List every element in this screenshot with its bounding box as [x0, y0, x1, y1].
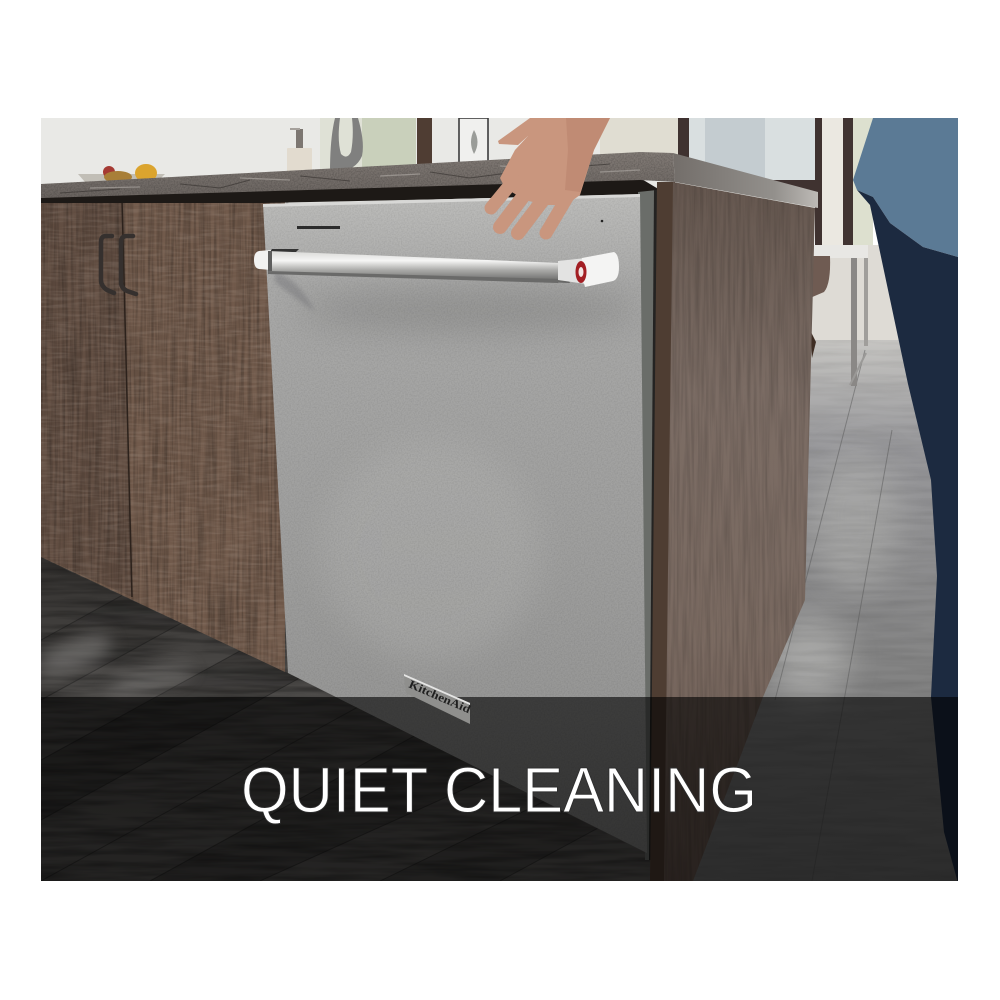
wood end strip: [650, 182, 675, 881]
left dark floor: [32, 550, 661, 881]
hand on dishwasher: [491, 118, 610, 233]
dishwasher side gap: [638, 190, 654, 860]
KitchenAid badge: KitchenAid: [407, 679, 473, 716]
person shirt: [853, 118, 958, 257]
floor planks: [157, 651, 298, 697]
product photo panel with caption: [41, 118, 958, 881]
soap dispenser: [287, 128, 312, 172]
framed picture: [459, 118, 488, 163]
lower cabinet doors: [41, 196, 291, 676]
back wall and right floor: [690, 245, 958, 881]
cabinet handles: [101, 236, 136, 294]
person jeans: [857, 190, 958, 883]
fruit bowl: [78, 164, 165, 183]
background wall: [41, 118, 815, 208]
caption banner: [41, 697, 958, 881]
countertop: [41, 150, 818, 208]
red handle medallion: [576, 261, 586, 283]
table and chair: [810, 245, 868, 386]
cabinet end panel: [660, 180, 820, 885]
faucet: [330, 118, 363, 172]
kitchen window left: [320, 118, 432, 173]
title: QUIET CLEANING: QUIET CLEANING: [241, 754, 757, 826]
shadow under countertop: [41, 178, 660, 203]
status light: [601, 220, 603, 222]
dishwasher handle: [254, 249, 619, 312]
right side windows: [600, 118, 873, 248]
control slot: [297, 226, 340, 229]
dishwasher door: [260, 190, 652, 860]
KitchenAid badge: [404, 674, 473, 724]
